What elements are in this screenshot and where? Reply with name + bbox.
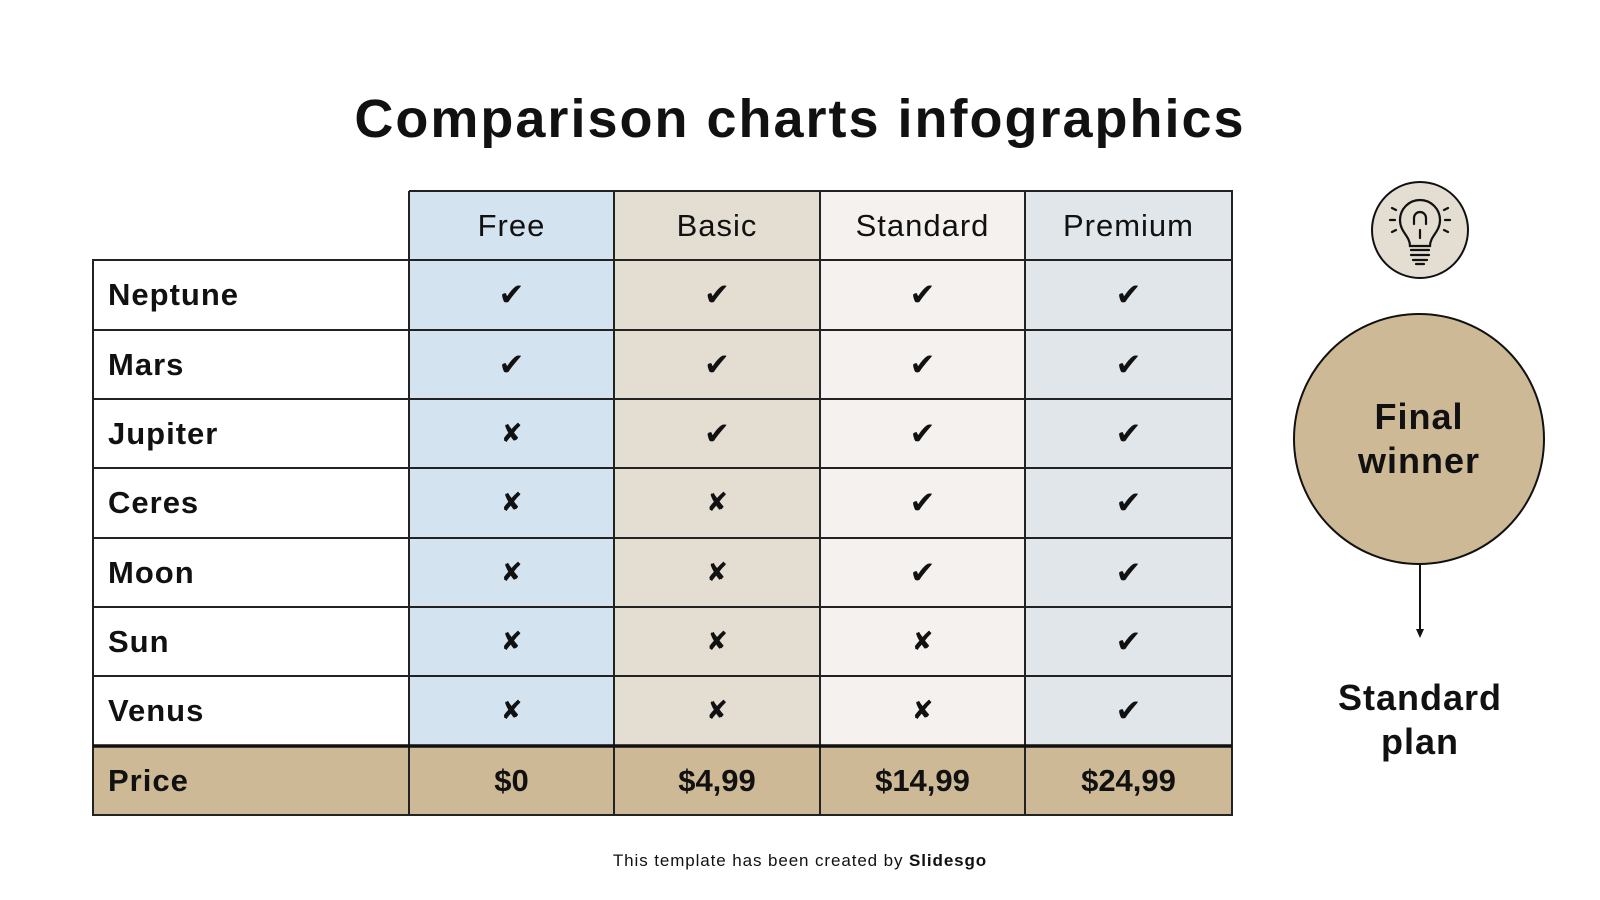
text: ✔ <box>1116 693 1141 729</box>
text: ✘ <box>706 488 728 518</box>
text: ✔ <box>704 346 730 382</box>
text: ✘ <box>501 488 522 518</box>
text: Free <box>478 208 545 242</box>
text: Mars <box>108 346 184 382</box>
text: Jupiter <box>108 416 218 450</box>
text: ✘ <box>501 626 522 656</box>
text: ✘ <box>912 696 933 726</box>
text: Moon <box>108 554 195 590</box>
text: ✘ <box>501 558 522 588</box>
text: ✔ <box>910 277 935 313</box>
text: ✘ <box>912 626 933 656</box>
text: ✔ <box>704 277 730 313</box>
text: ✔ <box>910 554 935 590</box>
text: $4,99 <box>678 762 756 798</box>
text: $14,99 <box>875 762 970 798</box>
title: Comparison charts infographics <box>354 89 1246 149</box>
text: ✔ <box>910 346 935 382</box>
arrow <box>1416 565 1424 638</box>
text: ✔ <box>1116 485 1141 521</box>
text: ✔ <box>498 277 524 313</box>
text: ✘ <box>501 696 522 726</box>
icon: lightbulb <box>1371 181 1469 279</box>
text: standard plan: plan <box>1381 721 1459 762</box>
text: $24,99 <box>1081 762 1176 798</box>
text: ✔ <box>1116 624 1141 660</box>
callout: final winner circle: winner <box>1358 440 1480 481</box>
text: ✔ <box>704 416 730 452</box>
text: ✔ <box>1116 346 1141 382</box>
text: ✘ <box>706 626 728 656</box>
text: Premium <box>1063 208 1194 242</box>
text: Sun <box>108 624 170 658</box>
text: $0 <box>494 762 529 798</box>
text: ✘ <box>706 696 728 726</box>
callout: final winner circle <box>1293 313 1545 565</box>
marks <box>498 277 1141 729</box>
text: Venus <box>108 693 204 728</box>
text: ✔ <box>1116 416 1141 452</box>
text: ✔ <box>910 416 935 452</box>
text: Price <box>108 762 189 798</box>
text: standard plan <box>1338 677 1502 762</box>
text: Ceres <box>108 485 199 520</box>
text: ✔ <box>498 346 524 382</box>
text: ✔ <box>1116 277 1141 313</box>
text: ✔ <box>1116 554 1141 590</box>
footer: This template has been created by Slidesgo <box>613 851 987 870</box>
callout: final winner circle: Final <box>1374 396 1464 437</box>
text: ✔ <box>910 485 935 521</box>
text: ✘ <box>501 418 522 448</box>
text: ✘ <box>706 558 728 588</box>
text: Standard <box>856 208 989 242</box>
text: standard plan: Standard <box>1338 677 1502 718</box>
text: Neptune <box>108 277 239 312</box>
text: Basic <box>677 208 757 242</box>
